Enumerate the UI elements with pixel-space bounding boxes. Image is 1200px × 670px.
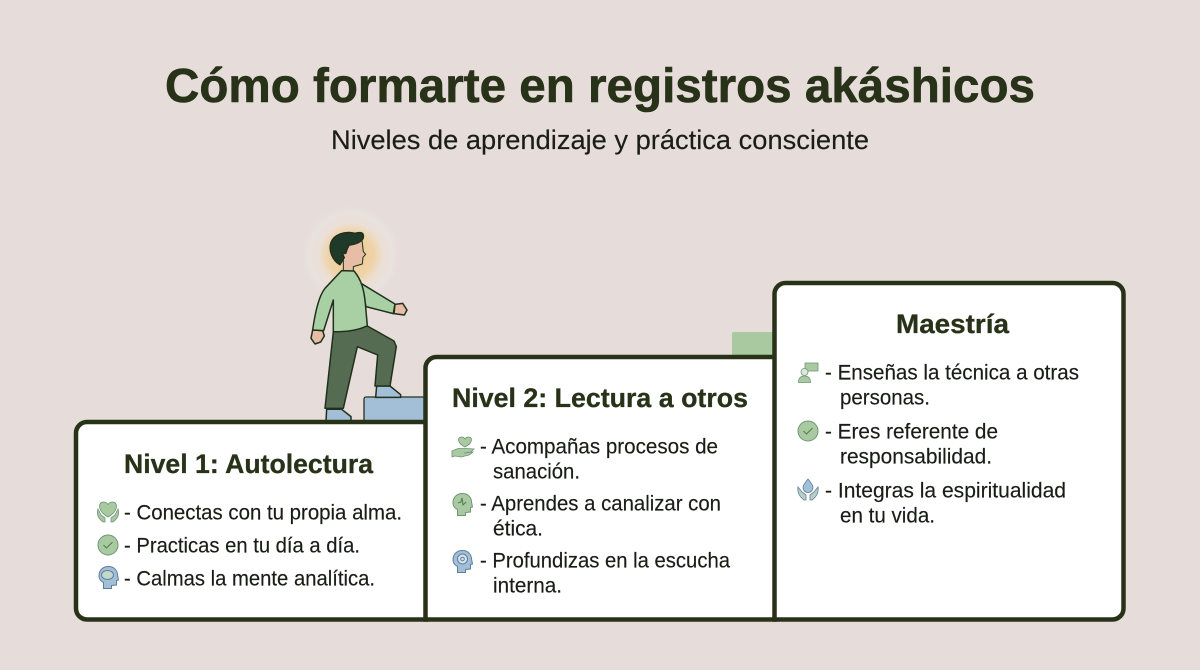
text: ética. <box>493 518 543 540</box>
hair <box>330 233 363 265</box>
text: - Profundizas en la escucha <box>480 550 730 572</box>
text: - Enseñas la técnica a otras <box>825 362 1079 384</box>
card 1 <box>76 422 426 620</box>
hand left <box>311 330 324 344</box>
text: - Acompañas procesos de <box>480 436 718 458</box>
text: - Conectas con tu propia alma. <box>124 502 402 524</box>
icon: head with spark <box>453 494 472 516</box>
hand right <box>394 303 407 315</box>
text: - Aprendes a canalizar con <box>480 492 721 516</box>
text: - Eres referente de <box>825 420 998 444</box>
icon: drop in hands <box>798 479 818 500</box>
text: responsabilidad. <box>840 446 992 468</box>
icon: teacher <box>798 363 818 382</box>
text: - Calmas la mente analítica. <box>124 568 375 590</box>
icon: heart over hand <box>452 437 474 457</box>
panel: nivel 1 <box>76 422 426 620</box>
icon: heart in hands <box>97 502 119 522</box>
panel: maestría <box>774 283 1124 620</box>
text: sanación. <box>493 460 580 484</box>
title: Cómo formarte en registros akáshicos <box>165 60 1035 113</box>
green step <box>732 332 778 360</box>
torso and left arm <box>313 271 367 332</box>
text: personas. <box>840 386 930 410</box>
icon: check <box>798 421 818 441</box>
card 2 <box>426 357 775 620</box>
person climbing <box>311 233 407 421</box>
heading: Nivel 1: Autolectura <box>124 449 374 479</box>
heading: Nivel 2: Lectura a otros <box>452 383 748 413</box>
icon: head with spiral <box>453 550 472 572</box>
text: - Integras la espiritualidad <box>825 480 1066 502</box>
front shoe <box>376 386 401 397</box>
neck and face <box>343 240 366 273</box>
panel: nivel 2 <box>426 357 775 620</box>
icon: check <box>98 535 118 555</box>
right arm <box>361 283 395 314</box>
rear shoe <box>326 409 351 421</box>
text: interna. <box>493 574 562 598</box>
text: en tu vida. <box>840 504 935 528</box>
icon: head <box>99 566 118 588</box>
heading: Maestría <box>896 309 1010 339</box>
halo <box>301 205 401 305</box>
text: - Practicas en tu día a día. <box>124 534 360 558</box>
blue step <box>364 397 428 423</box>
pants <box>325 326 396 408</box>
card 3 <box>774 283 1124 620</box>
subtitle: Niveles de aprendizaje y práctica consciente <box>331 125 869 155</box>
